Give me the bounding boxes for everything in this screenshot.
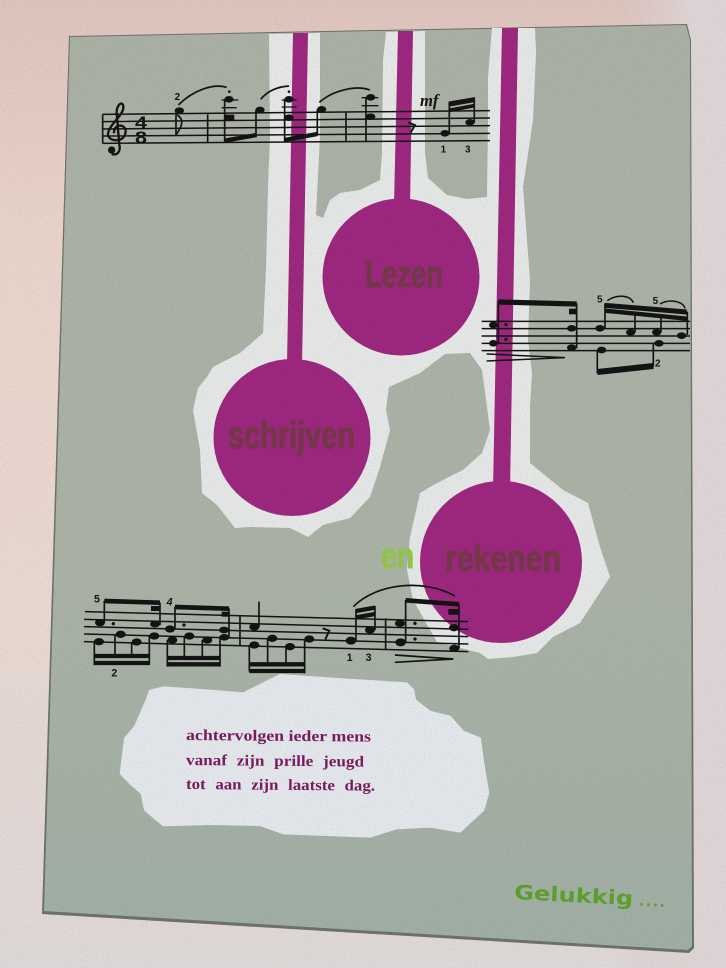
caption text: achtervolgen ieder mens [186, 727, 371, 746]
white torn paper shape [193, 28, 610, 659]
caption text: vanaf zijn prille jeugd [186, 752, 365, 771]
disc: schrijven [214, 33, 370, 516]
magenta stems and discs [214, 28, 582, 643]
stave: lower music line: 3 [366, 652, 372, 664]
stave: lower music line: 4 [166, 597, 173, 609]
caption text: tot aan zijn laatste dag. [186, 776, 375, 795]
stave: right music line: 5 [653, 296, 659, 307]
time signature [135, 113, 147, 147]
disc: lezen [322, 31, 480, 356]
disc: rekenen [420, 28, 582, 643]
word: rekenen: rekenen [445, 538, 561, 579]
word: Lezen: Lezen [365, 254, 443, 296]
stave: right music line: 2 [655, 359, 661, 370]
stave: right music line [482, 295, 690, 373]
stave: top music line [103, 86, 490, 155]
stave: top music line: 1 [441, 144, 447, 155]
closing word: Gelukkig: .... [639, 894, 665, 911]
icon: treble clef [108, 104, 126, 154]
word: schrijven: schrijven [228, 415, 355, 457]
time signature: 4 [135, 113, 147, 133]
word: en: en [381, 535, 414, 576]
stave: right music line: 5 [597, 295, 603, 306]
closing word: Gelukkig [514, 880, 666, 912]
time signature: 8 [135, 127, 147, 147]
stave: lower music line: 5 [94, 593, 100, 605]
stave: lower music line: 1 [347, 652, 353, 664]
stave: lower music line [84, 585, 468, 680]
stave: top music line: mf [420, 91, 440, 110]
caption text [186, 727, 375, 795]
stave: top music line: 3 [465, 144, 471, 155]
stave: lower music line: 2 [111, 668, 117, 680]
text panel: torn paper [121, 675, 488, 837]
closing word: Gelukkig: Gelukkig [514, 880, 634, 910]
stave: top music line: 2 [175, 92, 181, 103]
